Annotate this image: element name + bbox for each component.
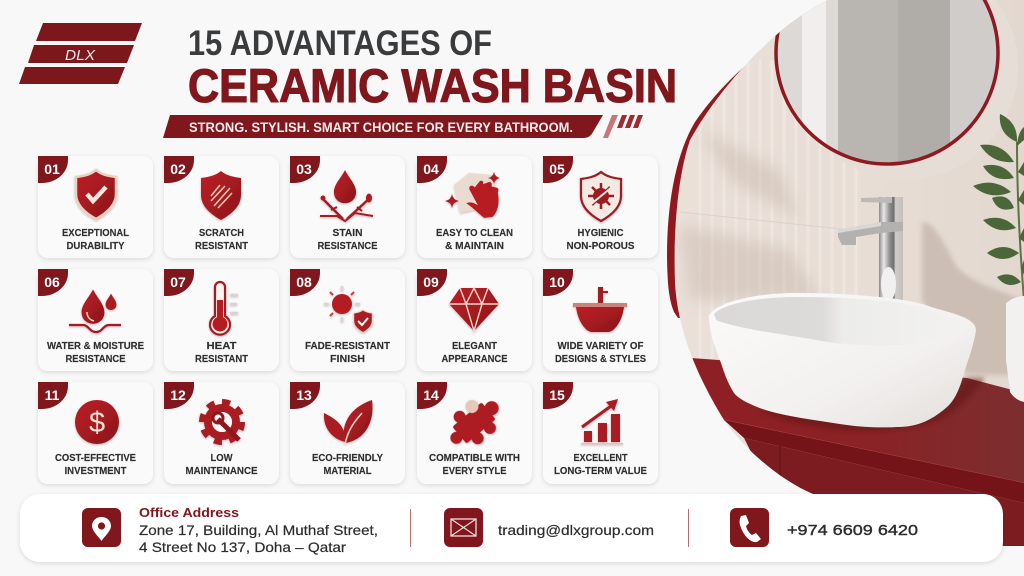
card 10: 10 xyxy=(549,274,565,290)
card 08: 08 xyxy=(296,274,312,290)
card 07: 07 xyxy=(170,274,186,290)
card 13: 13 xyxy=(296,387,312,403)
card 05: NON-POROUS xyxy=(566,241,635,252)
card 13: ECO-FRIENDLY xyxy=(312,453,383,464)
card 08 xyxy=(290,269,405,371)
icon: leaves xyxy=(324,400,373,444)
phone block xyxy=(730,508,918,547)
logo xyxy=(19,23,142,84)
card 04: EASY TO CLEAN xyxy=(436,228,513,239)
card 10: DESIGNS & STYLES xyxy=(555,354,646,365)
logo: DLX xyxy=(65,47,96,64)
title line 2: CERAMIC WASH BASIN xyxy=(188,59,677,112)
icon: growth chart xyxy=(581,399,623,444)
card 12: MAINTENANCE xyxy=(186,466,258,477)
card 03: RESISTANCE xyxy=(318,241,378,252)
card 09: APPEARANCE xyxy=(442,354,508,365)
card 10 xyxy=(543,269,658,371)
card 04 xyxy=(417,156,532,258)
card 12: LOW xyxy=(210,453,233,464)
card 15 xyxy=(543,382,658,484)
card 11: INVESTMENT xyxy=(64,466,126,477)
card 10: WIDE VARIETY OF xyxy=(558,341,644,352)
card 01 xyxy=(38,156,153,258)
card 15: EXCELLENT xyxy=(574,453,628,464)
email block xyxy=(444,508,654,547)
card 13 xyxy=(290,382,405,484)
basin shadow xyxy=(760,378,985,431)
icon: diamond xyxy=(449,288,499,331)
card 03: 03 xyxy=(296,161,312,177)
red crescent arc xyxy=(667,0,900,318)
card 08: FINISH xyxy=(330,354,365,365)
card 08: FADE-RESISTANT xyxy=(305,341,390,352)
card 11: 11 xyxy=(45,387,60,403)
card 15: LONG-TERM VALUE xyxy=(554,466,647,477)
mirror xyxy=(770,0,1000,170)
phone block: +974 6609 6420 xyxy=(787,522,918,539)
card 03 xyxy=(290,156,405,258)
card 05: 05 xyxy=(549,161,565,177)
wash basin xyxy=(709,293,976,427)
card 14 xyxy=(417,382,532,484)
card 14: 14 xyxy=(423,387,439,403)
card 02: 02 xyxy=(170,161,186,177)
icon: phone xyxy=(730,508,769,547)
icon: location pin xyxy=(82,508,121,547)
mirror halo xyxy=(830,151,858,169)
card 02: RESISTANT xyxy=(195,241,248,252)
plant xyxy=(973,114,1024,300)
card 13: MATERIAL xyxy=(324,466,372,477)
icon: sun and shield xyxy=(324,286,372,332)
card 05: HYGIENIC xyxy=(578,228,624,239)
plant pot xyxy=(1006,296,1024,402)
address block: Office Address xyxy=(139,505,239,520)
icon: thermometer xyxy=(210,282,238,335)
icon: dollar coin: $ xyxy=(89,407,105,439)
card 06: RESISTANCE xyxy=(66,354,126,365)
contact bar xyxy=(20,494,1003,562)
email block: trading@dlxgroup.com xyxy=(498,522,654,538)
icon: basin and tap xyxy=(573,287,627,332)
card 15: 15 xyxy=(549,387,565,403)
card 09: ELEGANT xyxy=(452,341,497,352)
card 06 xyxy=(38,269,153,371)
card 09: 09 xyxy=(423,274,439,290)
address block xyxy=(82,505,378,555)
icon: water drops xyxy=(69,289,121,332)
card 11: COST-EFFECTIVE xyxy=(55,453,136,464)
card 14: EVERY STYLE xyxy=(442,466,507,477)
card 01: 01 xyxy=(44,161,60,177)
card 05 xyxy=(543,156,658,258)
card 06: 06 xyxy=(44,274,60,290)
card 14: COMPATIBLE WITH xyxy=(429,453,520,464)
icon: gear and wrench xyxy=(202,402,242,442)
card 07: RESISTANT xyxy=(195,354,248,365)
card 07 xyxy=(164,269,279,371)
counter xyxy=(670,358,1024,546)
tagline banner xyxy=(163,115,643,138)
icon: shield check xyxy=(76,170,116,219)
card 04: 04 xyxy=(423,161,439,177)
card 04: & MAINTAIN xyxy=(445,241,504,252)
icon: hygienic shield xyxy=(581,172,621,221)
icon: envelope xyxy=(444,508,483,547)
card 06: WATER & MOISTURE xyxy=(47,341,144,352)
address block: Zone 17, Building, Al Muthaf Street, xyxy=(139,522,378,538)
icon: cleaning hand xyxy=(445,172,500,218)
wall shadows xyxy=(680,130,820,300)
tagline banner: STRONG. STYLISH. SMART CHOICE FOR EVERY BATHROOM. xyxy=(189,119,573,135)
card 01: DURABILITY xyxy=(66,241,125,252)
icon: stain drop xyxy=(320,170,373,221)
card 12 xyxy=(164,382,279,484)
card 03: STAIN xyxy=(332,228,362,239)
card 12: 12 xyxy=(170,387,186,403)
title line 1: 15 ADVANTAGES OF xyxy=(188,24,492,63)
icon: puzzle piece xyxy=(439,388,510,457)
icon: scratched shield xyxy=(201,171,241,220)
card 09 xyxy=(417,269,532,371)
card 11 xyxy=(38,382,153,484)
card 01: EXCEPTIONAL xyxy=(62,228,129,239)
bathroom photo xyxy=(660,0,1024,546)
fluted tiles xyxy=(698,60,858,295)
address block: 4 Street No 137, Doha – Qatar xyxy=(139,539,346,555)
card 02: SCRATCH xyxy=(199,228,244,239)
faucet shadow on wall xyxy=(922,222,1024,375)
faucet xyxy=(838,197,903,302)
card 07: HEAT xyxy=(206,341,236,352)
card 02 xyxy=(164,156,279,258)
